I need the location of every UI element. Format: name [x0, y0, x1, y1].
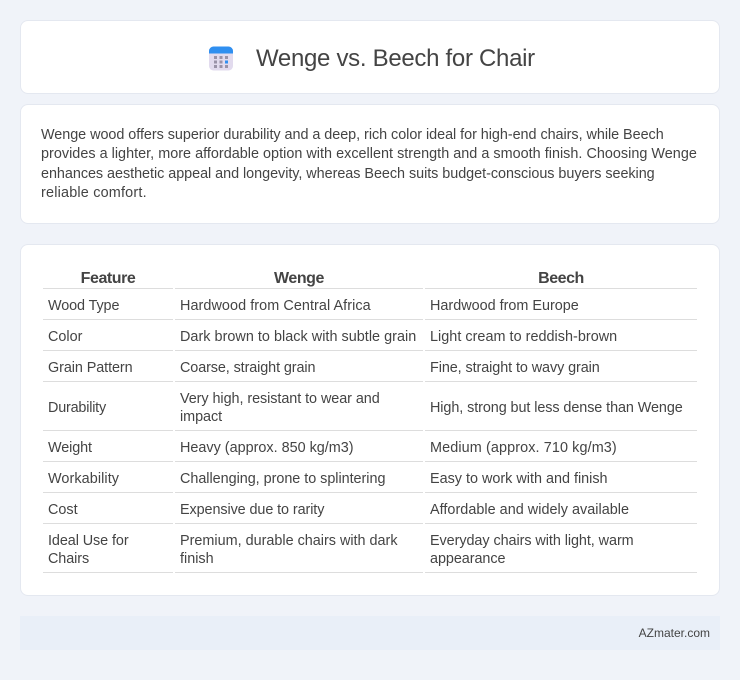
icon: calendar	[209, 46, 233, 70]
row: Grain Pattern: Coarse, straight grain	[180, 360, 315, 376]
summary text	[41, 127, 697, 201]
row: Weight	[43, 440, 697, 462]
column header: Beech: Beech	[538, 270, 584, 287]
row: Color: Color	[48, 329, 82, 345]
row: Weight: Medium (approx. 710 kg/m3)	[430, 440, 617, 456]
panel: summary	[20, 104, 720, 224]
panel: comparison table	[20, 244, 720, 596]
summary text: provides a lighter, more affordable option with excellent strength and a smooth finish. Choosing Wenge	[41, 146, 697, 162]
row: Wood Type: Hardwood from Europe	[430, 298, 579, 314]
row: Durability	[43, 391, 697, 431]
row: Grain Pattern: Grain Pattern	[48, 360, 133, 376]
row: Color	[43, 329, 697, 351]
footer bar	[20, 616, 720, 650]
row: Cost: Expensive due to rarity	[180, 502, 324, 518]
column header: Feature: Feature	[81, 270, 135, 287]
row: Ideal Use for Chairs: Everyday chairs with light, warm	[430, 533, 634, 549]
row: Ideal Use for Chairs: appearance	[430, 551, 505, 567]
row: Ideal Use for Chairs: Chairs	[48, 551, 89, 567]
column header: Wenge: Wenge	[274, 270, 324, 287]
summary text: reliable comfort.	[41, 185, 147, 201]
row: Durability: Durability	[48, 400, 106, 416]
row: Wood Type	[43, 298, 697, 320]
row: Workability	[43, 471, 697, 493]
row: Durability: impact	[180, 409, 222, 425]
row: Ideal Use for Chairs: Ideal Use for	[48, 533, 129, 549]
row: Weight: Heavy (approx. 850 kg/m3)	[180, 440, 354, 456]
row: Workability: Easy to work with and finish	[430, 471, 608, 487]
row: Color: Light cream to reddish-brown	[430, 329, 617, 345]
row: Workability: Workability	[48, 471, 119, 487]
row: Grain Pattern	[43, 360, 697, 382]
title: Wenge vs. Beech for Chair	[256, 45, 535, 72]
row: Ideal Use for Chairs: Premium, durable chairs with dark	[180, 533, 398, 549]
footer credit: AZmater.com	[639, 626, 710, 640]
row: Ideal Use for Chairs	[43, 533, 697, 573]
row: Weight: Weight	[48, 440, 92, 456]
comparison table	[43, 270, 697, 573]
row: Wood Type: Wood Type	[48, 298, 119, 314]
row: Wood Type: Hardwood from Central Africa	[180, 298, 371, 314]
row: Cost: Cost	[48, 502, 78, 518]
row: Durability: Very high, resistant to wear and	[180, 391, 380, 407]
row: Cost	[43, 502, 697, 524]
summary text: Wenge wood offers superior durability and a deep, rich color ideal for high-end chairs, while Beech	[41, 127, 664, 143]
panel: title header	[20, 20, 720, 94]
row: Ideal Use for Chairs: finish	[180, 551, 214, 567]
row: Cost: Affordable and widely available	[430, 502, 629, 518]
row: Workability: Challenging, prone to splintering	[180, 471, 385, 487]
row: Durability: High, strong but less dense than Wenge	[430, 400, 683, 416]
row: Color: Dark brown to black with subtle grain	[180, 329, 416, 345]
summary text: enhances aesthetic appeal and longevity, whereas Beech suits budget-conscious buyers seeking	[41, 166, 655, 182]
row: Grain Pattern: Fine, straight to wavy grain	[430, 360, 600, 376]
